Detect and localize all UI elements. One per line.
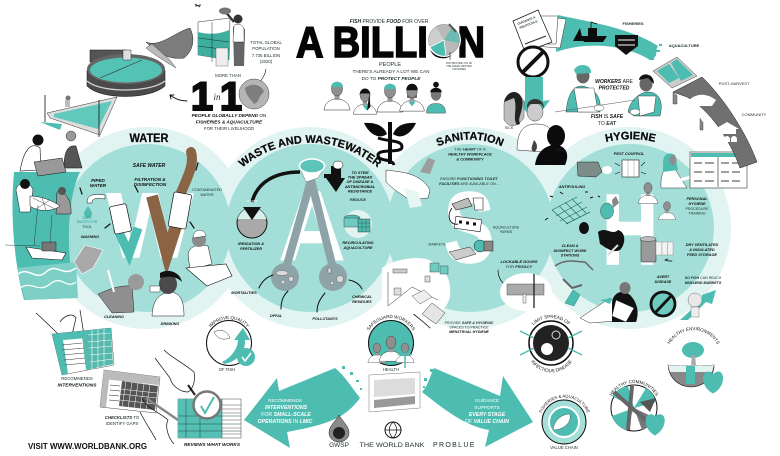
text: menstrual hygiene: PROVIDE SAFE & HYGIENIC	[445, 321, 494, 325]
tiny note: THE ANIMAL PROTEIN	[446, 65, 472, 68]
soil circle: WATER	[247, 199, 258, 203]
labels: FERTILIZER	[240, 247, 262, 251]
icon: hand holding magnifier	[155, 350, 195, 392]
icon: feed bags	[656, 242, 673, 255]
waste pipes	[285, 180, 334, 272]
arrow: guidance supports: OF VALUE CHAIN	[465, 419, 509, 425]
pipeline through S	[449, 198, 483, 232]
soil circle	[237, 199, 267, 238]
text: recommends interventions: RECOMMENDS	[61, 376, 93, 381]
text: antimicrobial: RESISTANCE	[348, 190, 373, 194]
badge: fisheries and aquaculture value chain	[539, 394, 590, 450]
icon: recirculating tanks	[344, 210, 372, 238]
logos row	[329, 415, 475, 449]
icon: heart	[646, 415, 664, 435]
text: heart of workplace: THE HEART OF A	[454, 148, 486, 152]
icon: round tank	[87, 50, 165, 96]
badge: safeguard workers health: HEALTH	[383, 367, 399, 372]
badge: improve quality of fish	[206, 316, 255, 372]
labels: IRRIGATION &	[238, 242, 264, 246]
arrow: recommends interventions: RECOMMENDS	[268, 398, 302, 403]
text: clean and disinfect	[553, 244, 587, 258]
text: antimicrobial: THE SPREAD	[348, 176, 372, 180]
badge: safeguard workers health: SAFEGUARD WORKERS	[367, 314, 415, 330]
text: workers and fish: WORKERS ARE	[595, 79, 634, 85]
text: more than: MORE THAN	[215, 73, 241, 78]
heading: sanitation: SANITATION	[436, 132, 504, 146]
panel: checklists	[36, 310, 241, 447]
panel: pale outer circles	[46, 127, 731, 329]
labels: FILTRATION &	[134, 177, 166, 182]
icon: net	[545, 192, 600, 224]
badge: healthy environments: HEALTHY ENVIRONMENTS	[667, 327, 720, 344]
logo: World Bank: THE WORLD BANK	[360, 442, 425, 449]
big stat: one in ten: in	[213, 92, 221, 102]
text: feed storage	[655, 243, 722, 285]
faucet	[87, 195, 105, 203]
text: antimicrobial	[344, 171, 376, 202]
panel: teal inner circles	[63, 144, 714, 312]
title block	[296, 18, 485, 81]
logo: GWSP: GWSP	[329, 442, 349, 449]
labels: TOOL	[82, 225, 92, 229]
labels: MORTALITIES	[231, 291, 257, 295]
contaminated water channel	[152, 196, 176, 254]
icon: man with box	[186, 230, 232, 286]
badge: healthy environments	[667, 327, 723, 394]
panel: value chain swoosh	[513, 10, 767, 168]
labels: WATER	[200, 193, 214, 197]
text: workers and fish: PROTECTED	[599, 86, 630, 92]
badge: healthy communities: HEALTHY COMMUNITIES	[610, 380, 658, 396]
icon: caduceus	[364, 122, 416, 165]
labels: FISHERIES	[622, 21, 644, 26]
icon: cleaning bag	[98, 270, 144, 313]
icon: hand with pen	[140, 398, 178, 444]
text: feed storage: DISEASE	[655, 280, 672, 284]
arrow: recommends interventions	[244, 366, 362, 448]
text: heart of workplace: & COMMUNITY	[456, 158, 484, 162]
text: personal hygiene: TRAINING	[688, 212, 706, 216]
text: heart of workplace: AQUACULTURE	[493, 226, 520, 230]
arrow: teal downward	[517, 77, 550, 122]
icon: small feeding box	[90, 50, 126, 62]
badge: limit spread of infectious disease	[520, 314, 582, 372]
chart: gray checklist	[100, 370, 160, 413]
letter W: W	[107, 175, 193, 277]
labels: POST-HARVEST	[719, 81, 750, 86]
text: personal hygiene: PROCEDURE	[686, 207, 709, 211]
white fish	[689, 95, 716, 106]
text: menstrual hygiene: SPACES TO PRACTICE	[449, 326, 489, 330]
labels: CHEMICAL	[352, 295, 373, 299]
arrow	[414, 314, 430, 328]
label: pest control: PEST CONTROL	[614, 151, 645, 156]
arrow to tank	[170, 95, 187, 101]
logo: ProBlue: PROBLUE	[433, 442, 475, 449]
text: heart of workplace: MARKETS	[429, 242, 446, 246]
text: feed storage: FEED STORAGE	[687, 253, 717, 257]
text: heart of workplace: ENSURE FUNCTIONING TOILET	[440, 177, 499, 181]
labels: CLEANING	[104, 315, 124, 319]
tiny note: FISH PROVIDE 17% OF	[446, 62, 473, 65]
chart: reviewed checklist	[178, 399, 241, 438]
text: people depend: FISHERIES & AQUACULTURE	[196, 120, 263, 124]
icon: feed barrel	[640, 236, 656, 262]
icon: reports: PROTOCOLS	[519, 19, 538, 30]
icon: spray bottle	[563, 279, 582, 306]
labels: WATER FOR	[77, 220, 98, 224]
filter cartridge right	[168, 192, 192, 229]
icon: shield net	[615, 35, 638, 55]
badge: limit spread of infectious disease: INFECTIOUS DISEASE	[531, 360, 572, 372]
icon: hand with clip	[36, 310, 84, 344]
icon: pellet bag	[577, 162, 612, 177]
icon: fish and hands	[146, 28, 193, 68]
badge: fisheries and aquaculture value chain: FISHERIES & AQUACULTURE	[539, 394, 590, 413]
arrows into pools	[259, 275, 362, 312]
icon: fishing boat	[5, 205, 66, 260]
text: people depend	[192, 113, 266, 131]
mortalities pool	[271, 263, 299, 291]
icon: magnifier	[188, 385, 220, 418]
text: feed storage: SO FISH CAN REACH	[685, 276, 722, 280]
labels: SAFE	[82, 216, 92, 220]
arrows	[80, 163, 198, 228]
filter cartridge left	[109, 203, 132, 234]
panel: hygiene content	[545, 151, 747, 323]
black arrow down to hand	[324, 161, 345, 192]
icon: water drop	[84, 206, 92, 218]
icon: fish cage and worker	[195, 4, 245, 66]
labels: DISINFECTION	[134, 182, 167, 187]
text: heart of workplace: FARMS	[500, 230, 513, 234]
panel: aquaculture tanks top left	[40, 4, 245, 137]
text: menstrual hygiene: MENSTRUAL HYGIENE	[449, 330, 489, 334]
text: reviews what works: REVIEWS WHAT WORKS	[184, 442, 241, 447]
text: people depend: FOR THEIR LIVELIHOOD	[204, 126, 254, 131]
text: personal hygiene: PERSONAL	[686, 197, 708, 201]
items in pools	[276, 268, 344, 285]
icon: sick people	[504, 92, 567, 165]
big stat: one in ten	[191, 75, 242, 119]
arrow: recommends interventions: FOR SMALL-SCALE	[261, 412, 311, 418]
text: checklists: IDENTIFY GAPS	[106, 421, 138, 426]
text: recommends interventions: INTERVENTIONS	[58, 382, 97, 388]
post-harvest band	[673, 77, 757, 168]
swoosh band	[556, 15, 658, 60]
callout: total global population: TOTAL GLOBAL	[250, 40, 282, 45]
badge: improve quality of fish: OF FISH	[219, 367, 235, 372]
icon: globe pie in title	[427, 23, 461, 57]
labels: sick / die	[505, 126, 562, 152]
labels: PIPED	[91, 178, 106, 183]
text: feed storage: HIGH-END MARKETS	[685, 281, 722, 285]
chart: teal checklist	[52, 328, 114, 375]
callout: total global population	[250, 40, 282, 83]
icon: reports: GUIDANCE &	[517, 15, 537, 26]
title block: THERE'S ALREADY A LOT WE CAN	[352, 69, 430, 74]
letter H: H	[602, 174, 658, 286]
market table and aquaculture tank	[449, 240, 493, 260]
arrow: guidance supports: EVERY STAGE	[469, 412, 506, 418]
text: feed storage: AVERT	[656, 275, 670, 279]
panel: sanitation content	[382, 148, 552, 334]
icon: black brush blobs	[579, 222, 624, 255]
labels: OFFAL	[270, 314, 283, 318]
icon: coin and arrow	[680, 290, 716, 320]
text: antimicrobial: ANTIMICROBIAL	[344, 185, 376, 189]
labels: DRINKING	[161, 322, 179, 326]
text: personal hygiene: HYGIENE	[688, 202, 706, 206]
badge: fisheries and aquaculture value chain: VALUE CHAIN	[550, 445, 578, 450]
icon: pest trap	[615, 160, 646, 177]
title block: FISH PROVIDE FOOD FOR OVER	[350, 19, 429, 25]
icon: washing hands	[74, 245, 103, 274]
icon: training board	[690, 152, 747, 188]
labels: sick / die: SICK	[505, 126, 514, 130]
panel: fisheries crescent at left	[5, 131, 82, 300]
arrow: guidance supports	[422, 368, 533, 447]
label: antifouling: ANTIFOULING	[558, 184, 585, 189]
icon: teal glove tool	[600, 196, 619, 219]
tank	[300, 159, 324, 182]
text: heart of workplace: FOR PRIVACY	[506, 264, 533, 269]
icon: man face	[638, 182, 658, 204]
tiny note	[446, 52, 473, 71]
labels: AQUACULTURE	[342, 246, 373, 250]
supports	[673, 92, 703, 130]
badge: improve quality of fish: IMPROVE QUALITY	[208, 316, 250, 328]
text: antimicrobial: TO STEM	[352, 171, 369, 175]
badge: healthy communities	[610, 380, 665, 436]
text: menstrual hygiene	[445, 321, 494, 334]
panel: water content	[74, 152, 232, 326]
house and community	[715, 122, 739, 142]
icon: woman teaching	[661, 153, 695, 188]
labels: RESIDUES	[352, 300, 372, 304]
icon: reports	[513, 10, 566, 52]
black flow arrow to soil	[252, 172, 300, 202]
badge: safeguard workers health	[367, 314, 415, 372]
logo: World Bank	[360, 422, 425, 449]
heading: hygiene: HYGIENE	[605, 132, 656, 142]
callout: total global population: POPULATION	[252, 46, 280, 51]
arrow: recommends interventions: INTERVENTIONS	[265, 405, 308, 411]
arrow: recommends interventions: OPERATIONS IN LMIC	[258, 419, 313, 425]
icon: fish market sellers	[20, 131, 82, 176]
arrow: guidance supports: GUIDANCE	[475, 398, 499, 403]
icons: workers processing fish	[555, 65, 661, 116]
icon: no disease sign	[651, 292, 675, 316]
safe water channel	[117, 228, 138, 254]
big stat: one in ten: 1	[220, 75, 242, 119]
big stat: one in ten: 1	[191, 75, 213, 119]
text: clean and disinfect: DISINFECT WORK	[553, 249, 587, 253]
logo: GWSP	[329, 415, 349, 449]
labels: RECIRCULATING	[342, 241, 374, 245]
labels	[77, 163, 222, 326]
icon: woman drinking	[150, 271, 184, 316]
icon: hands washing	[386, 158, 435, 208]
heading: waste and wastewater: WASTE AND WASTEWATER	[238, 135, 382, 168]
labels: sick / die: DIE	[555, 148, 562, 152]
icon: fishing boat	[573, 22, 607, 42]
icon: rectangular pond	[40, 95, 117, 137]
text: personal hygiene	[686, 197, 709, 216]
arrow to storage	[665, 259, 672, 261]
text: workers and fish	[591, 79, 634, 127]
icon: globe	[239, 79, 269, 109]
callout: total global population: 7.735 BILLION	[252, 53, 280, 58]
icon: worker cleaning	[580, 282, 638, 323]
labels	[622, 21, 767, 117]
icon: fishers hauling net	[16, 179, 71, 214]
labels: CONTAMINATED	[192, 188, 222, 192]
text: antimicrobial: REDUCE	[350, 198, 366, 202]
panel: waste content	[231, 159, 376, 321]
pollutants pool	[319, 263, 347, 291]
text: heart of workplace: LOCKABLE DOORS	[501, 259, 538, 264]
letter S: S	[444, 172, 494, 284]
text: workers and fish: FISH IS SAFE	[591, 114, 624, 120]
text: heart of workplace	[429, 148, 538, 269]
callout: total global population: (2020)	[260, 59, 273, 64]
labels: WASHING	[81, 235, 99, 239]
text: checklists: CHECKLISTS TO	[105, 415, 140, 420]
text: recommends interventions	[58, 376, 97, 388]
icons: five workers	[324, 82, 446, 114]
heading: water: WATER	[130, 131, 169, 145]
contaminated pipe	[180, 152, 192, 195]
labels: COMMUNITY	[742, 112, 767, 117]
icon: double pond	[653, 57, 697, 88]
title block: A BILLION	[296, 18, 485, 67]
tiny note: CONSUMED	[452, 68, 466, 71]
icon: heart	[704, 372, 723, 393]
text: people depend: PEOPLE GLOBALLY DEPEND ON	[192, 113, 266, 118]
text: antimicrobial: OF DISEASE &	[347, 180, 374, 184]
labels: AQUACULTURE	[669, 43, 700, 48]
text: clean and disinfect: CLEAN &	[562, 244, 579, 248]
text: clean and disinfect: STATIONS	[561, 254, 580, 258]
title block: DO TO PROTECT PEOPLE	[362, 76, 421, 81]
labels: WATER	[90, 183, 107, 188]
labels	[231, 241, 374, 321]
arrow: guidance supports: SUPPORTS	[474, 405, 500, 410]
text: feed storage: DRY VENTILATED	[686, 243, 718, 247]
icon: report photo	[369, 372, 420, 412]
icon: clean bathroom space	[382, 258, 450, 324]
text: heart of workplace: HEALTHY WORKPLACE	[448, 152, 492, 156]
text: checklists	[105, 415, 140, 426]
letter A: A	[279, 171, 345, 281]
title block: PEOPLE	[379, 62, 401, 68]
text: feed storage: & INSULATED	[689, 248, 715, 252]
icon: no-sign	[518, 47, 548, 77]
text: visit website: VISIT WWW.WORLDBANK.ORG	[28, 442, 147, 451]
icon: lockable door	[498, 270, 552, 311]
labels: SAFE WATER	[133, 163, 166, 169]
icon: man face right	[659, 202, 675, 220]
labels: POLLUTANTS	[312, 317, 338, 321]
icon: hose	[555, 261, 593, 270]
badge: limit spread of infectious disease: LIMIT SPREAD OF	[532, 314, 570, 325]
swoosh flecks	[650, 44, 662, 60]
text: heart of workplace: FACILITIES ARE AVAILABLE ON...	[439, 182, 499, 186]
text: workers and fish: TO EAT	[598, 121, 617, 127]
